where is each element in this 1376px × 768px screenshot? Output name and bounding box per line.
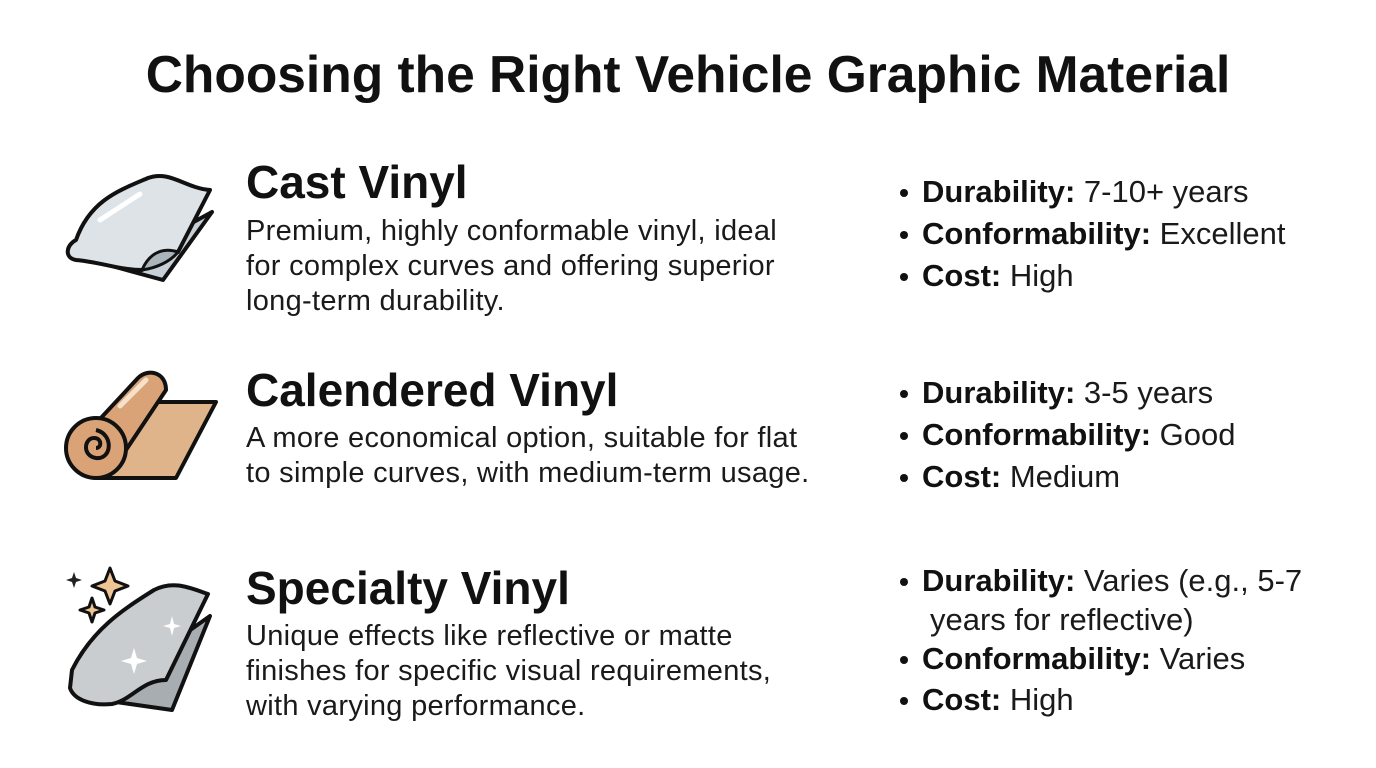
text: cast vinyl description bbox=[246, 215, 777, 317]
text: specialty vinyl description: with varying performance. bbox=[246, 690, 586, 722]
bullets: specialty vinyl: years for reflective) bbox=[930, 602, 1194, 637]
bullets: calendered vinyl bbox=[900, 375, 1236, 494]
icon: calendered vinyl roll bbox=[64, 370, 218, 480]
heading: cast vinyl: Cast Vinyl bbox=[246, 156, 468, 208]
bullets: specialty vinyl: Durability: Varies (e.g., 5-7 bbox=[922, 563, 1302, 598]
icon: specialty vinyl sparkle sheet bbox=[66, 566, 212, 712]
heading: specialty vinyl: Specialty Vinyl bbox=[246, 562, 570, 614]
bullets: calendered vinyl: Conformability: Good bbox=[922, 417, 1236, 452]
bullets: calendered vinyl: Cost: Medium bbox=[922, 459, 1120, 494]
bullets: calendered vinyl: Durability: 3-5 years bbox=[922, 375, 1213, 410]
bullets: specialty vinyl bbox=[900, 563, 1302, 717]
text: specialty vinyl description bbox=[246, 620, 771, 722]
text: cast vinyl description: long-term durability. bbox=[246, 285, 505, 317]
heading: calendered vinyl: Calendered Vinyl bbox=[246, 364, 618, 416]
text: calendered vinyl description: A more economical option, suitable for flat bbox=[246, 422, 797, 454]
bullets: cast vinyl: Conformability: Excellent bbox=[922, 216, 1285, 251]
icon: cast vinyl sheet bbox=[66, 174, 214, 282]
title: Choosing the Right Vehicle Graphic Material bbox=[146, 45, 1230, 103]
bullets: cast vinyl bbox=[900, 174, 1286, 293]
text: calendered vinyl description bbox=[246, 422, 809, 489]
text: specialty vinyl description: finishes for specific visual requirements, bbox=[246, 655, 771, 687]
bullets: cast vinyl: Durability: 7-10+ years bbox=[922, 174, 1248, 209]
text: specialty vinyl description: Unique effects like reflective or matte bbox=[246, 620, 733, 652]
text: cast vinyl description: Premium, highly conformable vinyl, ideal bbox=[246, 215, 777, 247]
text: cast vinyl description: for complex curves and offering superior bbox=[246, 250, 775, 282]
text: calendered vinyl description: to simple curves, with medium-term usage. bbox=[246, 457, 809, 489]
bullets: specialty vinyl: Conformability: Varies bbox=[922, 641, 1245, 676]
bullets: cast vinyl: Cost: High bbox=[922, 258, 1074, 293]
bullets: specialty vinyl: Cost: High bbox=[922, 682, 1074, 717]
